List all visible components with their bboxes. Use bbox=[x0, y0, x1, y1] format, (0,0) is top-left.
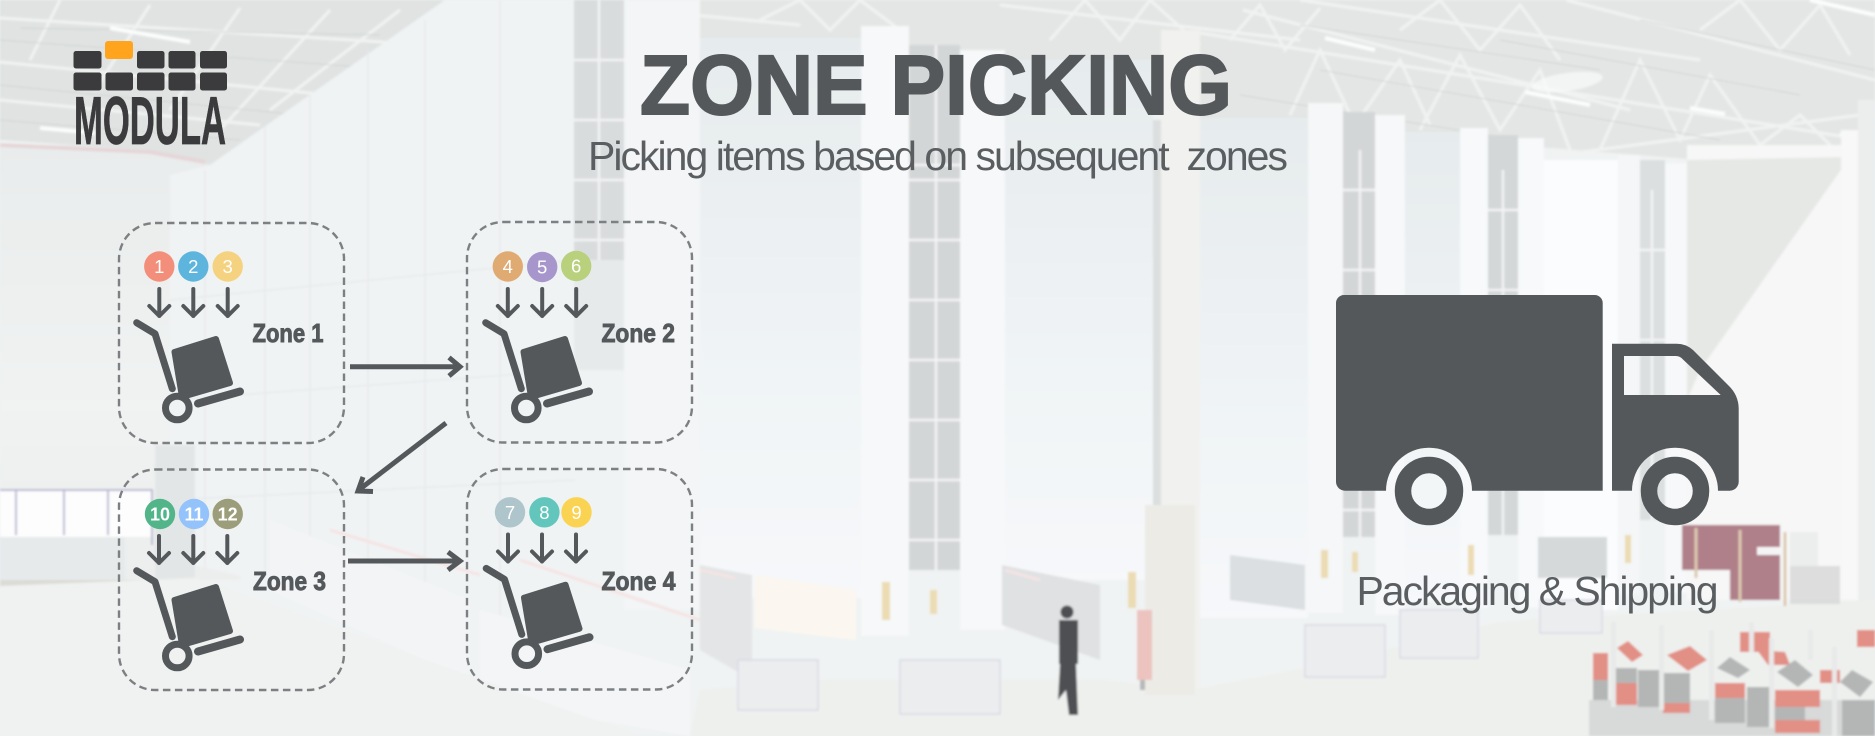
panel: zone 1 bbox=[119, 223, 344, 443]
low machine openings bbox=[755, 575, 856, 640]
window grids bbox=[574, 0, 1665, 570]
zone 1 item badges bbox=[144, 251, 243, 282]
zone 3 label: Zone 3 bbox=[253, 566, 326, 596]
left wall bbox=[0, 145, 240, 580]
arrow: zone 3 to zone 4 bbox=[348, 552, 460, 570]
zone 3 item badges bbox=[145, 499, 243, 529]
bins bbox=[738, 600, 1602, 714]
icon: hand truck bbox=[486, 323, 589, 420]
zone 4 item badges: 7 bbox=[505, 502, 515, 523]
labels on machines bbox=[882, 535, 1631, 620]
zone 1 item badges: 2 bbox=[188, 256, 198, 277]
zone 2 pick arrows bbox=[498, 289, 586, 316]
panel: zone 2 bbox=[467, 222, 692, 442]
ceiling bbox=[0, 0, 445, 165]
picking carts bbox=[1589, 622, 1875, 736]
icon: hand truck bbox=[486, 568, 590, 666]
zone 3 item badges: 11 bbox=[184, 504, 204, 524]
zone 2 label: Zone 2 bbox=[602, 318, 675, 348]
zone 2 item badges: 6 bbox=[571, 256, 581, 276]
arrow: zone 1 to zone 2 bbox=[350, 358, 460, 376]
zone 3 item badges: 10 bbox=[150, 504, 170, 524]
zone 1 label: Zone 1 bbox=[252, 318, 324, 348]
zone 3 pick arrows bbox=[149, 536, 237, 563]
subtitle: Picking items based on subsequent zones bbox=[588, 133, 1288, 179]
zone 4 item badges bbox=[495, 497, 592, 528]
windows at far left bbox=[0, 490, 152, 537]
logo: Modula: MODULA bbox=[74, 83, 226, 159]
icon: hand truck bbox=[137, 323, 240, 420]
title: ZONE PICKING bbox=[640, 38, 1232, 132]
zone 4 label: Zone 4 bbox=[602, 566, 676, 596]
storage tower blocks bbox=[574, 0, 624, 260]
person bbox=[1058, 606, 1078, 715]
zone 2 item badges: 5 bbox=[537, 256, 547, 278]
zone 2 item badges: 4 bbox=[503, 256, 513, 277]
zone 1 pick arrows bbox=[149, 289, 238, 316]
shipping label: Packaging & Shipping bbox=[1356, 568, 1718, 614]
zone 4 item badges: 8 bbox=[539, 502, 550, 523]
icon: delivery truck bbox=[1336, 295, 1739, 517]
zone 4 item badges: 9 bbox=[571, 502, 582, 523]
floor bbox=[0, 578, 640, 736]
zone 2 item badges bbox=[493, 251, 591, 282]
zone 3 item badges: 12 bbox=[218, 504, 238, 524]
icon: hand truck bbox=[137, 571, 240, 668]
zone 4 pick arrows bbox=[498, 534, 586, 562]
zone 1 item badges: 3 bbox=[223, 256, 233, 277]
left machine wall bbox=[170, 0, 580, 650]
right wall bbox=[1687, 145, 1847, 600]
electrical cabinets bbox=[1682, 525, 1780, 600]
arrow: zone 2 to zone 3 bbox=[358, 423, 446, 492]
panel: zone 3 bbox=[119, 470, 344, 690]
zone 1 item badges: 1 bbox=[154, 256, 164, 277]
logo: Modula bbox=[74, 41, 227, 159]
panel: zone 4 bbox=[467, 469, 692, 690]
